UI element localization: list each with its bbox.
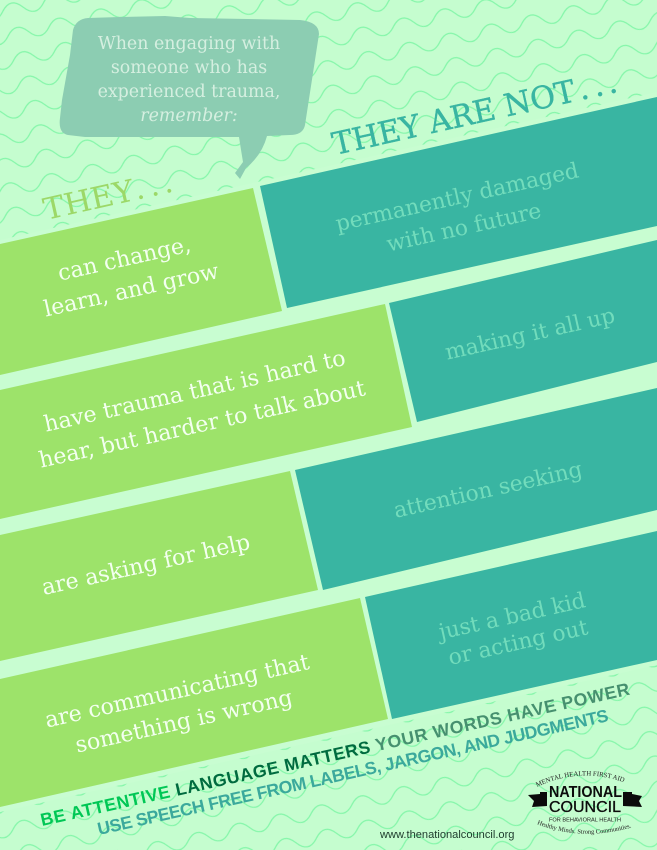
heading: they: ... — [131, 165, 176, 208]
text: just a bad kid: or acting out — [446, 615, 591, 671]
heading: they — [40, 165, 176, 228]
logo wordmark: NATIONAL — [549, 784, 622, 801]
text: can change — [34, 227, 221, 322]
panel: they are not, row 3 — [295, 388, 657, 590]
logo ribbons — [528, 792, 547, 807]
text: are communicating: are communicating that — [43, 649, 312, 733]
panel: they are not, row 2 — [389, 240, 657, 422]
text: can change: can change, — [55, 232, 193, 287]
text: are asking for help: are asking for help — [39, 529, 253, 601]
logo tagline: Healthy Minds. Strong Communities. — [537, 820, 632, 836]
heading: they are not: THEY ARE NOT — [329, 74, 579, 163]
slogan line one: BE ATTENTIVE LANGUAGE MATTERS YOUR WORDS HAVE POWER — [39, 679, 632, 830]
bubble text: experienced trauma, — [98, 82, 280, 102]
logo: national council: COUNCIL — [549, 799, 621, 816]
text: making it all up: making it all up — [443, 303, 617, 366]
website url: www.thenationalcouncil.org — [379, 829, 514, 841]
text: have trauma: have trauma that is hard to — [42, 345, 348, 438]
bubble text: someone who has — [111, 58, 267, 78]
heading: they are not: ... — [575, 64, 621, 108]
panel: they, row 3 — [0, 471, 318, 661]
logo arc text: MENTAL HEALTH FIRST AID — [535, 771, 624, 787]
text: are communicating: something is wrong — [73, 685, 295, 758]
logo: national council: FOR BEHAVIORAL HEALTH — [549, 818, 621, 824]
panel: they, row 1 — [0, 188, 282, 375]
text: can change: learn, and grow — [41, 258, 221, 322]
text: attention seeking: attention seeking — [391, 457, 585, 524]
heading: they: THEY — [40, 173, 139, 228]
slogan line two: USE SPEECH FREE FROM LABELS, JARGON, AND JUDGMENTS — [96, 705, 611, 839]
speech bubble — [60, 16, 319, 179]
text: just a bad kid — [434, 588, 594, 672]
bubble text: remember: — [140, 106, 238, 126]
bubble text: When engaging with — [98, 34, 280, 54]
logo: national council — [528, 771, 642, 836]
text: have trauma: hear, but harder to talk about — [37, 375, 368, 474]
panel: they are not, row 1 — [260, 97, 657, 308]
text: just a bad kid: just a bad kid — [434, 588, 588, 646]
text: permanently damaged: permanently damaged — [333, 159, 581, 237]
panel: they, row 4 — [0, 598, 388, 807]
panel: they, row 2 — [0, 304, 412, 519]
panel: they are not, row 4 — [365, 531, 657, 719]
text: permanently damaged: with no future — [384, 199, 544, 257]
